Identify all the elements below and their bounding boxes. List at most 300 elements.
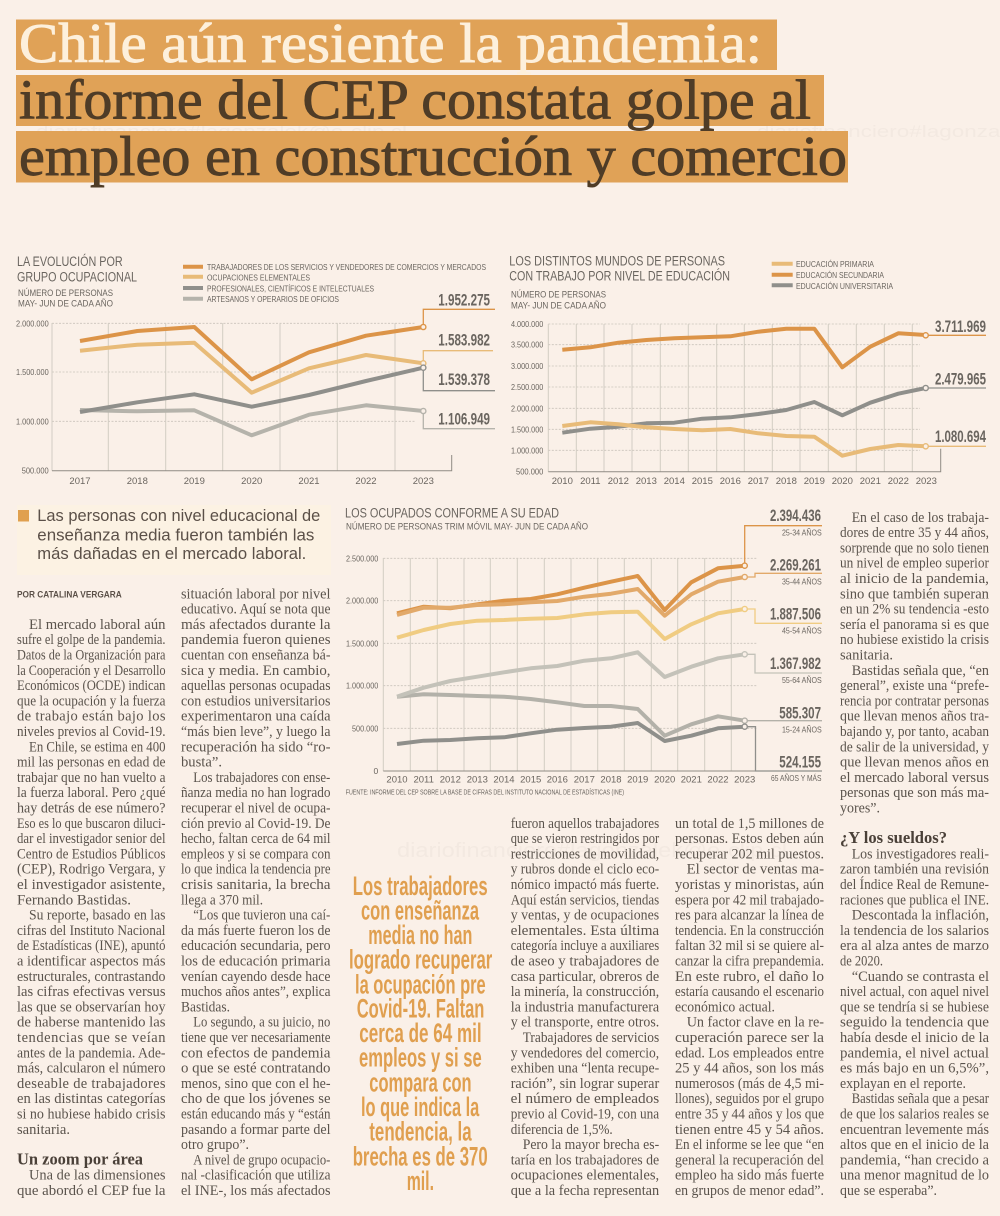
text column 5: había desde el inicio de la: [840, 1030, 990, 1046]
text column 1: la fuerza laboral. Pero ¿qué: [17, 785, 166, 801]
text column 4: tendencia. En la construcción: [675, 923, 825, 939]
text column 5: bajando y, por tanto, acaban: [840, 724, 990, 740]
legend: EDUCACIÓN UNIVERSITARIA: [796, 281, 893, 291]
callout: 1.080.694: [923, 428, 987, 449]
text column 5: sanitaria.: [840, 648, 893, 664]
text column 1: dar el investigador senior del: [17, 831, 166, 847]
text column 2: venían cayendo desde hace: [181, 969, 330, 985]
title: empleo en construcción y comercio: [19, 126, 847, 188]
text column 4: En el informe se lee que “en: [675, 1137, 825, 1153]
text column 5: encuentran levemente más: [840, 1122, 989, 1138]
x axis labels: 2018: [776, 476, 797, 487]
text column 2: muchos años antes”, explica: [181, 984, 331, 1000]
text column 4: numerosos (más de 4,5 mi-: [675, 1076, 824, 1092]
x axis labels: 2012: [608, 476, 629, 487]
callout: 1.887.506: 1.887.506: [770, 605, 821, 623]
watermark: diariofinanciero#lagonzalek@e-clip.cl: [36, 122, 407, 141]
text column 5: Descontada la inflación,: [852, 908, 989, 924]
text column 2: o que se esté contratando: [181, 1061, 330, 1077]
line: 65 años y más: [397, 723, 745, 744]
text column 5: de 2020.: [840, 954, 883, 970]
y axis labels: 2.000.000: [511, 403, 544, 413]
text column 4: general la recuperación del: [675, 1152, 824, 1168]
text column 5: En el caso de los trabaja-: [852, 510, 989, 526]
text column 5: el mercado laboral versus: [840, 770, 989, 786]
legend: [183, 262, 486, 304]
text column 5: es más bajo en un 6,5%”,: [840, 1061, 989, 1077]
pull quote: [349, 871, 493, 1196]
text column 2: Los trabajadores con ense-: [193, 770, 330, 786]
text column 2: “Los que tuvieron una caí-: [193, 908, 330, 924]
callout: 1.539.378: 1.539.378: [438, 371, 490, 389]
line: 45-54 años: [397, 609, 745, 639]
text column 2: busta”.: [181, 755, 222, 771]
callout: 585.307: [742, 704, 822, 734]
text column 2: aquellas personas ocupadas: [181, 678, 331, 694]
text column 5: sino que también superan: [840, 586, 990, 602]
text column 2: están educando más y “están: [181, 1106, 331, 1122]
text column 3: [511, 816, 660, 1199]
x axis labels: [69, 476, 434, 487]
text column 5: pandemia, “han crecido a: [840, 1152, 990, 1168]
text column 1: Una de las dimensiones: [29, 1168, 166, 1184]
text column 1: que abordó el CEP fue la: [17, 1183, 166, 1199]
chart heading: LOS OCUPADOS CONFORME A SU EDAD: [345, 506, 559, 521]
text column 4: cuperación parece ser la: [675, 1030, 825, 1046]
text column 4: El sector de ventas ma-: [687, 862, 824, 878]
text column 5: altos que en el inicio de la: [840, 1137, 990, 1153]
text column 3: y ventas, y de ocupaciones: [511, 908, 660, 924]
text column 1: mil las personas en edad de: [17, 755, 166, 771]
callout: 1.367.982: 55-64 AÑOS: [782, 675, 822, 685]
callout: 3.711.969: [923, 318, 986, 338]
y axis labels: 500.000: [22, 466, 49, 476]
line: educación secundaria: [562, 329, 926, 367]
callout: 1.952.275: 1.952.275: [438, 291, 490, 309]
x axis labels: 2020: [832, 476, 853, 487]
text column 2: ñanza media no han logrado: [181, 785, 330, 801]
pull quote: cerca de 64 mil: [359, 1018, 482, 1048]
legend: OCUPACIONES ELEMENTALES: [207, 272, 310, 282]
x axis labels: 2018: [600, 774, 622, 785]
text column 2: empleos y si se compara con: [181, 846, 331, 862]
y axis labels: [346, 553, 379, 776]
callout: 1.106.949: [421, 408, 495, 429]
text column 4: edad. Los empleados entre: [675, 1045, 824, 1061]
text column 1: niveles previos al Covid-19.: [17, 724, 166, 740]
text column 3: la industria manufacturera: [511, 999, 660, 1015]
text column 1: si no hubiese habido crisis: [17, 1106, 166, 1122]
x axis labels: 2015: [692, 476, 713, 487]
callout: 2.269.261: [742, 556, 822, 586]
pull quote: Covid-19. Faltan: [357, 993, 484, 1023]
pull quote: la ocupación pre: [355, 969, 486, 999]
text column 3: de aseo y trabajadores de: [511, 954, 659, 970]
x axis labels: [386, 774, 755, 785]
text column 2: pasando a formar parte del: [181, 1122, 330, 1138]
text column 4: canzar la cifra prepandemia.: [675, 954, 824, 970]
x axis labels: [552, 476, 937, 487]
x axis labels: 2023: [413, 476, 434, 487]
y axis labels: 3.500.000: [511, 340, 544, 350]
text column 1: Datos de la Organización para: [17, 648, 166, 664]
pull quote: Los trabajadores: [353, 871, 488, 901]
text column 1: Económicos (OCDE) indican: [17, 678, 166, 694]
text column 5: un nivel de empleo superior: [840, 556, 989, 572]
text column 1: Eso es lo que buscaron diluci-: [17, 816, 166, 832]
y axis labels: 2.500.000: [346, 553, 379, 563]
x axis labels: 2011: [580, 476, 601, 487]
lead callout: Las personas con nivel educacional de: [37, 506, 320, 525]
text column 5: general”, existe una “prefe-: [840, 678, 989, 694]
text column 5: del Índice Real de Remune-: [840, 876, 989, 893]
text column 2: ción previo al Covid-19. De: [181, 816, 330, 832]
callout: 2.394.436: [742, 507, 822, 568]
line: trabajadores de servicios: [80, 327, 423, 379]
text column 2: hecho, faltan cerca de 64 mil: [181, 831, 330, 847]
legend: TRABAJADORES DE LOS SERVICIOS Y VENDEDORES DE COMERCIOS Y MERCADOS: [207, 262, 486, 272]
x axis labels: 2017: [574, 774, 595, 785]
text column 1: las cifras efectivas versus: [17, 984, 166, 1000]
chart heading: MAY- JUN DE CADA AÑO: [18, 299, 113, 310]
text column 3: que se vieron restringidos por: [511, 831, 659, 847]
chart heading: [345, 506, 588, 532]
text column 1: hay detrás de ese número?: [17, 800, 166, 816]
text column 2: el INE-, los más afectados: [181, 1183, 331, 1199]
lead callout: [17, 505, 331, 575]
lead callout: enseñanza media fueron también las: [37, 525, 314, 544]
line: educación primaria: [562, 422, 926, 456]
pull quote: lo que indica la: [361, 1092, 480, 1122]
text column 3: Trabajadores de servicios: [523, 1030, 660, 1046]
text column 2: situación laboral por nivel: [181, 586, 330, 602]
callout: 2.394.436: 2.394.436: [770, 507, 821, 525]
text column 2: da más fuerte fueron los de: [181, 923, 330, 939]
line: 55-64 años: [397, 652, 745, 697]
lead callout: más dañadas en el mercado laboral.: [37, 544, 306, 563]
text column 1: Su reporte, basado en las: [29, 908, 166, 924]
text column 4: En este rubro, el daño lo: [675, 969, 824, 985]
text column 5: raciones que publica el INE.: [840, 892, 989, 908]
text column 3: y rubros donde el ciclo eco-: [511, 862, 659, 878]
callout: 1.952.275: [421, 291, 495, 330]
pull quote: media no han: [368, 920, 472, 950]
x axis labels: 2011: [413, 774, 434, 785]
text column 1: tendencias que se veían: [17, 1030, 166, 1046]
text column 1: la Cooperación y el Desarrollo: [17, 663, 166, 679]
text column 4: un total de 1,5 millones de: [675, 816, 824, 832]
text column 5: de salir de la universidad, y: [840, 739, 990, 755]
text column 4: económico actual.: [675, 999, 775, 1015]
text column 1: trabajar que no han vuelto a: [17, 770, 166, 786]
chart heading: LA EVOLUCIÓN POR: [17, 254, 123, 269]
callout: 1.367.982: 1.367.982: [770, 655, 821, 673]
text column 5: seguido la tendencia que: [840, 1015, 989, 1031]
source note: FUENTE: INFORME DEL CEP SOBRE LA BASE DE CIFRAS DEL INSTITUTO NACIONAL DE ESTADÍSTICAS (INE): [346, 787, 624, 796]
text column 5: pandemia, el nivel actual: [840, 1045, 989, 1061]
text column 5: no hubiese existido la crisis: [840, 632, 989, 648]
text column 2: recuperar el nivel de ocupa-: [181, 800, 331, 816]
text column 3: Pero la mayor brecha es-: [523, 1137, 659, 1153]
text column 4: Un factor clave en la re-: [687, 1015, 824, 1031]
y axis labels: 2.000.000: [346, 596, 379, 606]
text column 3: elementales. Esta última: [511, 923, 660, 939]
callout: 1.367.982: [742, 652, 822, 685]
text column 5: explayan en el reporte.: [840, 1076, 966, 1092]
x axis labels: 2021: [298, 476, 320, 487]
callout: 1.583.982: 1.583.982: [438, 331, 490, 349]
pull quote: con enseñanza: [361, 895, 480, 925]
callout: 2.479.965: [923, 371, 986, 391]
callout: 524.155: 65 AÑOS Y MÁS: [771, 773, 822, 783]
y axis labels: 1.000.000: [511, 445, 544, 455]
text column 4: faltan 32 mil si se quiere al-: [675, 938, 824, 954]
text column 1: Fernando Bastidas.: [17, 892, 131, 908]
text column 5: era al alza antes de marzo: [840, 938, 989, 954]
chart heading: CON TRABAJO POR NIVEL DE EDUCACIÓN: [509, 269, 730, 284]
text column 5: Los investigadores reali-: [852, 846, 989, 862]
text column 3: el número de empleados: [511, 1091, 660, 1107]
text column 2: otro grupo”.: [181, 1137, 249, 1153]
x axis labels: 2022: [888, 476, 909, 487]
chart: ocupados conforme a su edad: [345, 506, 822, 796]
title: [16, 13, 848, 188]
text column 2: con estudios universitarios: [181, 693, 331, 709]
y axis labels: 1.500.000: [346, 638, 379, 648]
text column 3: categoría incluye a auxiliares: [511, 938, 660, 954]
text column 2: tiene que ver necesariamente: [181, 1030, 330, 1046]
text column 2: educación secundaria, pero: [181, 938, 330, 954]
text column 1: deseable de trabajadores: [17, 1076, 166, 1092]
callout: 2.394.436: 25-34 AÑOS: [782, 527, 822, 537]
text column 3: casa particular, obreros de: [511, 969, 659, 985]
subheading: ¿Y los sueldos?: ¿Y los sueldos?: [840, 828, 947, 847]
legend: EDUCACIÓN SECUNDARIA: [796, 270, 884, 280]
text column 1: sufre el golpe de la pandemia.: [17, 632, 166, 648]
y axis labels: 4.000.000: [511, 319, 544, 329]
chart heading: NÚMERO DE PERSONAS: [18, 288, 113, 299]
text column 1: (CEP), Rodrigo Vergara, y: [17, 862, 166, 878]
text column 1: a identificar aspectos más: [17, 954, 166, 970]
chart heading: NÚMERO DE PERSONAS: [511, 289, 606, 300]
y axis labels: [511, 319, 544, 477]
y axis labels: 1.500.000: [16, 367, 49, 377]
x axis labels: 2020: [654, 774, 675, 785]
text column 3: fueron aquellos trabajadores: [511, 816, 660, 832]
x axis labels: 2013: [467, 774, 488, 785]
text column 5: personas que son más ma-: [840, 785, 989, 801]
text column 2: con efectos de pandemia: [181, 1045, 331, 1061]
line: profesionales: [80, 368, 423, 412]
callout: 1.887.506: [742, 605, 822, 636]
text column 5: la tendencia de los salarios: [840, 923, 989, 939]
line: 35-44 años: [397, 577, 745, 616]
y axis labels: 0: [374, 766, 378, 776]
text column 2: Lo segundo, a su juicio, no: [193, 1015, 330, 1031]
text column 3: ocupaciones elementales,: [511, 1168, 659, 1184]
text column 3: previo al Covid-19, con una: [511, 1106, 660, 1122]
watermark: [36, 122, 1000, 862]
text column 5: [840, 510, 990, 1199]
text column 1: las que se observarían hoy: [17, 999, 166, 1015]
text column 3: taría en los trabajadores de: [511, 1152, 659, 1168]
x axis labels: 2020: [241, 476, 262, 487]
text column 2: nal -clasificación que utiliza: [181, 1168, 331, 1184]
legend: ARTESANOS Y OPERARIOS DE OFICIOS: [207, 294, 339, 304]
text column 1: sanitaria.: [17, 1122, 70, 1138]
x axis labels: 2010: [386, 774, 408, 785]
chart: evolución por grupo ocupacional: [16, 254, 495, 487]
text column 2: “más bien leve”, y luego la: [181, 724, 331, 740]
x axis labels: 2019: [804, 476, 825, 487]
text column 1: de trabajo están bajo los: [17, 709, 166, 725]
x axis labels: 2023: [734, 774, 755, 785]
line: ocupaciones elementales: [80, 343, 423, 393]
x axis labels: 2019: [184, 476, 205, 487]
text column 2: experimentaron una caída: [181, 709, 331, 725]
text column 1: de haberse mantenido las: [17, 1015, 166, 1031]
text column 5: que se esperaba”.: [840, 1183, 937, 1199]
text column 4: recuperar 202 mil puestos.: [675, 846, 824, 862]
chart heading: [509, 253, 730, 311]
x axis labels: 2014: [664, 476, 685, 487]
legend: EDUCACIÓN PRIMARIA: [796, 259, 874, 269]
text column 5: “Cuando se contrasta el: [852, 969, 989, 985]
callout: 2.269.261: 2.269.261: [770, 556, 821, 574]
y axis labels: 500.000: [352, 723, 379, 733]
x axis labels: 2023: [916, 476, 937, 487]
callout: 1.583.982: [421, 331, 493, 366]
text column 4: espera por 42 mil trabajado-: [675, 892, 824, 908]
text column 2: crisis sanitaria, la brecha: [181, 877, 331, 893]
y axis labels: 1.000.000: [16, 416, 49, 426]
legend: [772, 259, 893, 291]
text column 1: que la ocupación y la fuerza: [17, 693, 166, 709]
text column 3: restricciones de movilidad,: [511, 846, 659, 862]
text column 3: Aquí están servicios, tiendas: [511, 892, 660, 908]
x axis labels: 2013: [636, 476, 657, 487]
text column 3: nómico impactó más fuerte.: [511, 877, 659, 893]
text column 5: al inicio de la pandemia,: [840, 571, 989, 587]
text column 2: sica y media. En cambio,: [181, 663, 330, 679]
text column 5: yores”.: [840, 800, 880, 816]
text column 5: que llevan menos años en: [840, 755, 990, 771]
text column 1: cifras del Instituto Nacional: [17, 923, 166, 939]
callout: 524.155: [742, 724, 822, 783]
text column 3: y vendedores del comercio,: [511, 1045, 659, 1061]
subheading: Un zoom por área: Un zoom por área: [17, 1149, 143, 1168]
chart: personas con trabajo por nivel de educación: [509, 253, 987, 487]
text column 5: dores de entre 35 y 44 años,: [840, 525, 989, 541]
text column 2: llega a 370 mil.: [181, 892, 263, 908]
callout: 1.887.506: 45-54 AÑOS: [782, 626, 822, 636]
text column 2: pandemia fueron quienes: [181, 632, 331, 648]
x axis labels: 2016: [720, 476, 741, 487]
chart heading: MAY- JUN DE CADA AÑO: [511, 300, 606, 311]
callout: 585.307: 15-24 AÑOS: [782, 724, 822, 734]
line: artesanos y operarios: [80, 405, 423, 435]
text column 2: A nivel de grupo ocupacio-: [193, 1152, 330, 1168]
text column 4: llones), seguidos por el grupo: [675, 1091, 824, 1107]
x axis labels: 2021: [681, 774, 702, 785]
y axis labels: [16, 318, 49, 476]
text column 1: más, calcularon el número: [17, 1061, 166, 1077]
text column 2: menos, sino que con el he-: [181, 1076, 331, 1092]
x axis labels: 2010: [552, 476, 573, 487]
text column 5: zaron también una revisión: [840, 862, 990, 878]
text column 3: diferencia de 1,5%.: [511, 1122, 613, 1138]
text column 1: Centro de Estudios Públicos: [17, 846, 166, 862]
pull quote: logrado recuperar: [349, 944, 493, 974]
pull quote: tendencia, la: [369, 1117, 472, 1147]
x axis labels: 2021: [860, 476, 881, 487]
pull quote: empleos y si se: [359, 1043, 482, 1073]
y axis labels: 1.000.000: [346, 681, 379, 691]
text column 1: antes de la pandemia. Ade-: [17, 1045, 166, 1061]
y axis labels: 1.500.000: [511, 424, 544, 434]
text column 2: lo que indica la tendencia pre: [181, 862, 330, 878]
x axis labels: 2012: [440, 774, 461, 785]
byline: POR CATALINA VERGARA: [17, 590, 122, 600]
chart heading: LOS DISTINTOS MUNDOS DE PERSONAS: [509, 253, 725, 268]
pull quote: brecha es de 370: [353, 1141, 488, 1171]
x axis labels: 2022: [355, 476, 377, 487]
x axis labels: 2022: [707, 774, 729, 785]
text column 2: educativo. Aquí se nota que: [181, 602, 330, 618]
text column 1: de Estadísticas (INE), apuntó: [17, 938, 166, 954]
text column 1: El mercado laboral aún: [29, 617, 166, 633]
text column 5: que se tendría si se hubiese: [840, 999, 989, 1015]
text column 4: en grupos de menor edad”.: [675, 1183, 824, 1199]
text column 5: que llevan menos años tra-: [840, 709, 989, 725]
x axis labels: 2016: [547, 774, 568, 785]
text column 4: 25 y 44 años, son los más: [675, 1061, 824, 1077]
callout: 1.106.949: 1.106.949: [438, 410, 490, 428]
x axis labels: 2017: [748, 476, 769, 487]
title: Chile aún resiente la pandemia:: [19, 13, 762, 75]
text column 2: cho de que los jóvenes se: [181, 1091, 330, 1107]
y axis labels: 2.000.000: [16, 318, 49, 328]
text column 1: [17, 617, 166, 1199]
text column 1: estructurales, contrastando: [17, 969, 166, 985]
text column 3: ración”, sin lograr superar: [511, 1076, 659, 1092]
text column 5: Bastidas señala que, “en: [852, 663, 990, 679]
text column 1: En Chile, se estima en 400: [29, 739, 166, 755]
chart heading: [17, 254, 137, 310]
line: 25-34 años: [397, 566, 745, 613]
title: informe del CEP constata golpe al: [19, 70, 811, 132]
x axis labels: 2014: [493, 774, 515, 785]
text column 4: yoristas y minoristas, aún: [675, 877, 825, 893]
text column 4: entre 35 y 44 años y los que: [675, 1106, 824, 1122]
text column 1: el investigador asistente,: [17, 877, 166, 893]
text column 2: Bastidas.: [181, 999, 230, 1015]
text column 4: personas. Estos deben aún: [675, 831, 825, 847]
y axis labels: 500.000: [516, 467, 544, 477]
text column 3: la minería, la construcción,: [511, 984, 659, 1000]
text column 2: recuperación ha sido “ro-: [181, 739, 331, 755]
x axis labels: 2018: [127, 476, 148, 487]
pull quote: compara con: [369, 1068, 472, 1098]
text column 4: tienen entre 45 y 54 años.: [675, 1122, 824, 1138]
text column 2: cuentan con enseñanza bá-: [181, 648, 331, 664]
x axis labels: 2015: [520, 774, 541, 785]
text column 2: los de educación primaria: [181, 954, 331, 970]
text column 3: y el transporte, entre otros.: [511, 1015, 659, 1031]
chart heading: GRUPO OCUPACIONAL: [17, 269, 137, 284]
chart heading: NÚMERO DE PERSONAS TRIM MÓVIL MAY- JUN DE CADA AÑO: [346, 521, 588, 532]
text column 4: estaría causando el escenario: [675, 984, 824, 1000]
